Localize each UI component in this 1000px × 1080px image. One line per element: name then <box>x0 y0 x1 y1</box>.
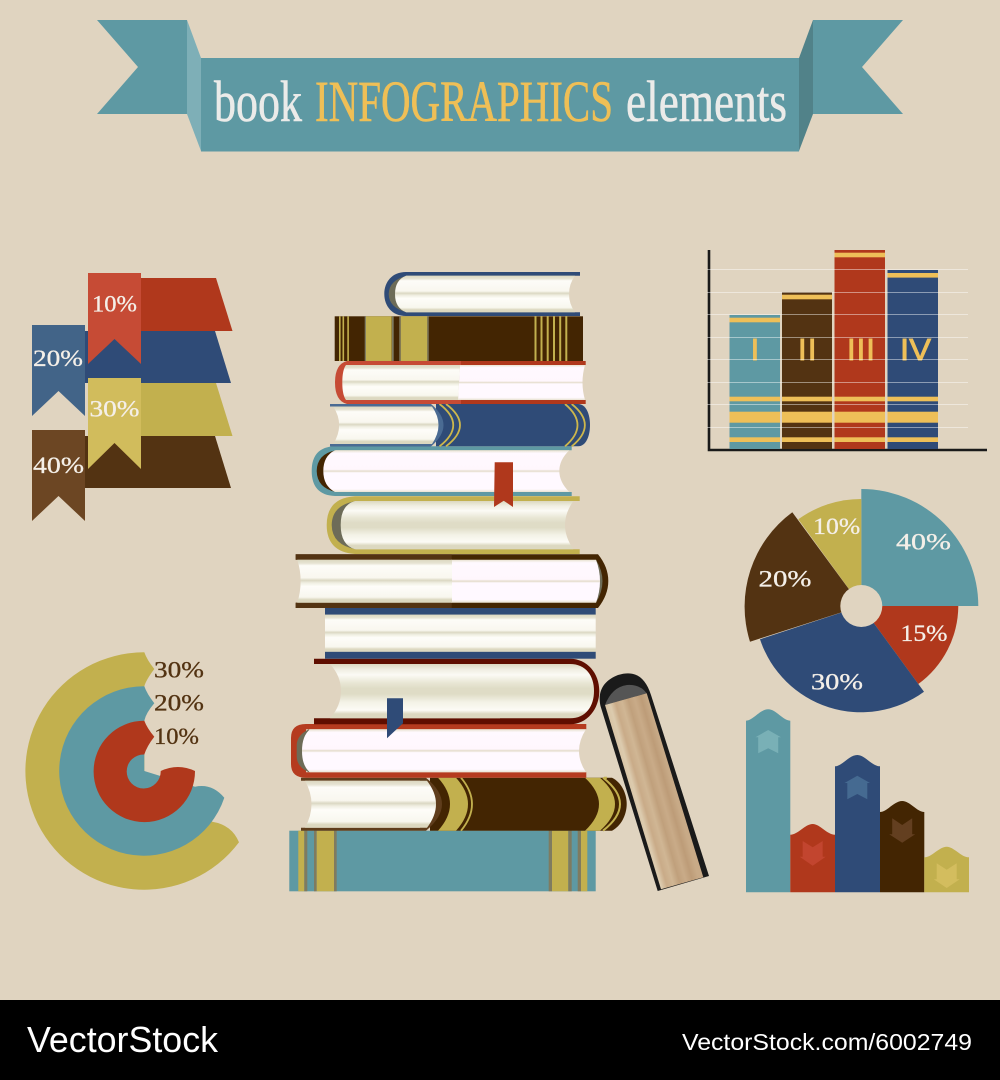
book: dark brown spine with gold bands <box>335 316 583 361</box>
ribbon bar chart <box>32 273 232 521</box>
ribbon: 10%: 10% <box>92 292 137 316</box>
title text: elements <box>626 69 787 134</box>
slice: 40% teal: 40% <box>896 529 951 554</box>
book: blue top book <box>384 272 580 316</box>
ring labels: 20% <box>154 691 204 716</box>
bookshelf bar chart <box>707 250 987 450</box>
title text: INFOGRAPHICS <box>315 69 613 134</box>
ring labels: 10% <box>154 724 199 749</box>
bar: III red book <box>834 250 885 449</box>
ribbon: 40%: 40% <box>33 453 84 478</box>
bookmark arrow bar chart <box>746 709 969 892</box>
book: teal cover <box>312 446 572 496</box>
footer bar <box>0 1000 1000 1080</box>
ring labels: 30% <box>154 657 204 682</box>
footer url: VectorStock.com/6002749 <box>682 1029 972 1055</box>
book: teal bottom spine <box>289 831 596 891</box>
ribbon: 10% <box>88 273 141 364</box>
slice: 20% brown <box>745 512 861 642</box>
book: dark red cover <box>314 659 599 724</box>
bar: IV blue book: IV <box>900 332 931 367</box>
ribbon: 20%: 20% <box>33 346 83 371</box>
bar: IV blue book <box>888 270 938 449</box>
bookmark: red <box>494 462 513 507</box>
concentric ring chart <box>25 652 239 890</box>
ribbon: 40% <box>32 430 85 521</box>
book stack <box>289 272 627 891</box>
ring labels <box>154 657 204 749</box>
bar: brown down <box>880 801 924 892</box>
bar: III red book: III <box>847 332 876 367</box>
bar: teal up <box>746 709 790 892</box>
bar: blue up <box>835 755 880 892</box>
book: dark brown two-tone <box>296 554 608 608</box>
slice: 15% red <box>861 606 958 684</box>
bookmark: blue <box>387 698 403 738</box>
axes <box>709 250 987 450</box>
slice: 15% red: 15% <box>900 621 948 646</box>
title text: book <box>214 69 302 134</box>
book: brown with gold bands <box>301 778 627 831</box>
ribbon: 30% <box>88 378 141 469</box>
exploded pie chart <box>745 489 978 712</box>
slice: 30% blue <box>760 606 924 712</box>
slice: 10% yellow <box>798 499 861 606</box>
title ribbon banner <box>97 20 903 152</box>
leaning book <box>600 673 709 891</box>
ribbon: 20% <box>32 325 85 416</box>
slice: 10% yellow: 10% <box>813 514 860 539</box>
ribbon: 30%: 30% <box>90 396 140 422</box>
slice: 20% brown: 20% <box>758 567 812 592</box>
book: red two-tone <box>335 361 586 404</box>
slice: 30% blue: 30% <box>811 669 863 694</box>
bar: red down <box>790 824 835 892</box>
slice: 40% teal <box>861 489 978 606</box>
bar: I teal book <box>730 315 780 449</box>
bar: I teal book: I <box>751 332 759 367</box>
bar: II brown book <box>782 292 832 449</box>
footer logo: VectorStock <box>27 1019 219 1060</box>
book: blue flat <box>325 608 596 659</box>
book: blue with gold arcs <box>330 404 590 446</box>
book: yellow cover <box>327 496 580 554</box>
book: red-orange cover <box>291 724 586 778</box>
bar: yellow down <box>924 847 969 892</box>
bar: II brown book: II <box>798 332 818 367</box>
